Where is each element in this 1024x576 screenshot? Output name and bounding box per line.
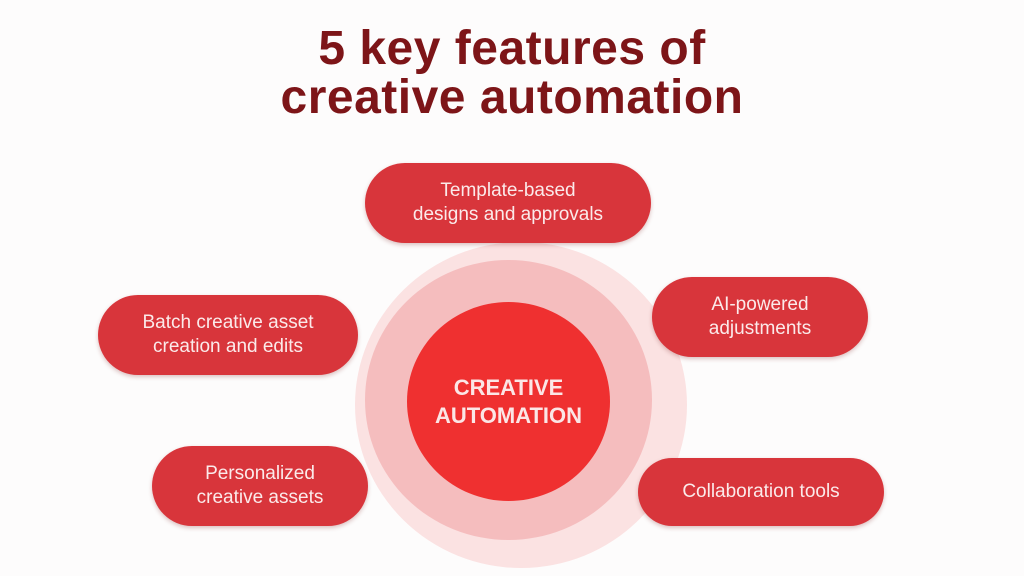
pill: collaboration: Collaboration tools	[682, 481, 840, 502]
pill: collaboration	[638, 458, 884, 526]
center circle: creative automation: AUTOMATION	[435, 402, 582, 428]
pill: batch: Batch creative asset	[142, 312, 314, 333]
outer circle	[355, 242, 687, 568]
pill: template-based: Template-based	[440, 180, 576, 201]
pill: personalized	[152, 446, 368, 526]
title: creative automation	[281, 71, 743, 124]
pill: template-based	[365, 163, 651, 243]
title	[281, 22, 743, 124]
pill: personalized: creative assets	[197, 487, 323, 508]
pill: batch: creation and edits	[153, 336, 303, 357]
middle ring	[365, 260, 652, 540]
pill: AI-powered	[652, 277, 868, 357]
title: 5 key features of	[318, 22, 706, 75]
pill: AI-powered: adjustments	[709, 318, 811, 339]
pill: personalized: Personalized	[205, 463, 315, 484]
center circle: creative automation	[407, 302, 610, 501]
pill: batch	[98, 295, 358, 375]
pill: AI-powered: AI-powered	[711, 294, 809, 315]
pill: template-based: designs and approvals	[413, 204, 603, 225]
center circle: creative automation: CREATIVE	[454, 374, 563, 400]
